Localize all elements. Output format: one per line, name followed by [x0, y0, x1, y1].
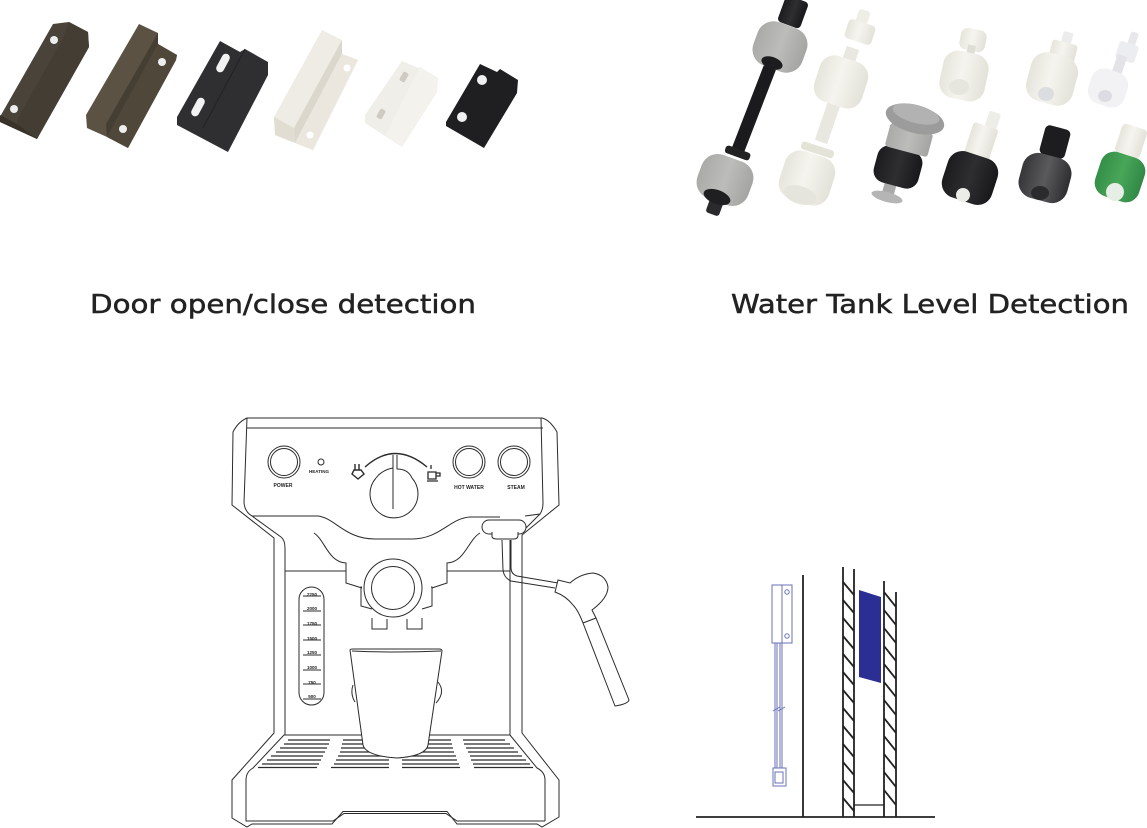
- power button: [268, 446, 300, 478]
- machine body outline: [232, 418, 559, 827]
- sensor 3: black with slots: [177, 41, 268, 152]
- coffee cup: [350, 649, 442, 758]
- water level gauge: 1750: [307, 621, 318, 626]
- float 4: small white: [937, 27, 991, 104]
- label: power: POWER: [274, 483, 293, 489]
- float 5: small white: [1022, 31, 1082, 109]
- door sensor installation diagram: [696, 567, 935, 817]
- sensor 6: black short: [446, 64, 518, 148]
- water level gauge: [299, 587, 324, 705]
- group head: [314, 533, 480, 629]
- control panel: [268, 446, 530, 518]
- heading: door detection: Door open/close detection: [90, 290, 476, 320]
- heating light: [318, 459, 324, 465]
- water level gauge: 500: [308, 694, 316, 699]
- float 6: tiny white: [1084, 31, 1139, 111]
- icon: steam wand: [352, 464, 364, 479]
- steam button: [498, 446, 530, 478]
- heading: water tank detection: Water Tank Level Detection: [731, 290, 1129, 320]
- float 1: long gray and black: [692, 0, 812, 217]
- water level float switch photos: [692, 0, 1147, 217]
- label: hot water: HOT WATER: [454, 485, 484, 491]
- wall line: [802, 575, 804, 817]
- float 2: long white: [775, 8, 876, 210]
- coffee machine line drawing: [232, 418, 629, 827]
- water level gauge: 1000: [307, 665, 318, 670]
- icon: coffee cup: [427, 465, 440, 481]
- label: heating: HEATING: [309, 469, 329, 474]
- door sensor product photos: [0, 22, 518, 152]
- sensor 1: dark brown: [0, 22, 89, 139]
- selector dial: [365, 454, 427, 518]
- steam wand: [482, 520, 629, 706]
- water level gauge: 2000: [307, 606, 318, 611]
- water level gauge: 1250: [307, 650, 318, 655]
- sensor with cable: [772, 585, 792, 786]
- float 8: dark mottled: [1015, 124, 1075, 207]
- water level gauge: 750: [308, 680, 316, 685]
- sensor 2: taupe brown: [86, 24, 177, 148]
- float 7: black with white nut: [938, 111, 1002, 209]
- sensor 4: white long: [274, 30, 358, 150]
- float 3: threaded gray with black float: [870, 98, 948, 206]
- water level gauge: 1500: [307, 636, 318, 641]
- float 9: green: [1091, 123, 1147, 206]
- label: steam: STEAM: [507, 485, 525, 491]
- blue magnet block: [859, 590, 881, 683]
- hatched door frame: [843, 567, 896, 817]
- drip tray slats: [258, 740, 533, 768]
- ground line: [696, 816, 935, 818]
- water level gauge: 2250: [307, 592, 318, 597]
- hot water button: [453, 446, 485, 478]
- sensor 5: white short: [365, 61, 438, 147]
